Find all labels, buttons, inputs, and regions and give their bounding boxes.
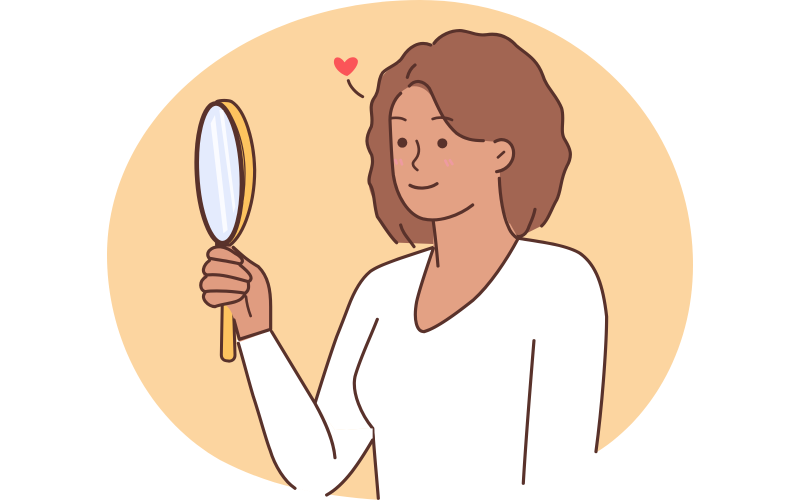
- blush: [395, 160, 452, 165]
- mirror inner rim line: [222, 103, 245, 244]
- hair: [367, 31, 570, 247]
- mirror rim back: [217, 100, 255, 245]
- smile: [410, 184, 437, 188]
- hair outline: [367, 31, 570, 243]
- mirror handle: [221, 300, 235, 361]
- top fill: [315, 238, 607, 500]
- eyebrows: [391, 118, 452, 120]
- neckline outline: [415, 239, 518, 332]
- head skin: [390, 86, 517, 253]
- thumb crease: [246, 297, 251, 316]
- bust line: [354, 319, 377, 440]
- hand: [203, 247, 271, 342]
- waist crease: [523, 341, 534, 483]
- nose: [413, 141, 419, 170]
- neck and chest skin: [415, 223, 518, 332]
- heart with motion line: [334, 57, 363, 97]
- face outline: [390, 93, 473, 220]
- hair strand: [401, 65, 535, 247]
- fringe edge: [409, 81, 483, 141]
- face: [390, 81, 517, 266]
- sleeve outline: [238, 332, 373, 495]
- eyes: [397, 138, 447, 148]
- mirror frame and glass: [193, 102, 245, 244]
- hair mass: [368, 31, 570, 244]
- mirror highlights: [211, 110, 235, 233]
- hand outline: [233, 247, 271, 339]
- torso in white top: [315, 238, 607, 500]
- top outline: [315, 238, 607, 498]
- background blob: [107, 0, 693, 500]
- icon: heart: [334, 57, 358, 76]
- neck lines: [433, 178, 517, 266]
- motion line: [348, 81, 363, 97]
- sleeve: [237, 329, 373, 495]
- fingers: [201, 247, 251, 307]
- ear: [495, 140, 514, 172]
- hand mirror: [193, 100, 271, 361]
